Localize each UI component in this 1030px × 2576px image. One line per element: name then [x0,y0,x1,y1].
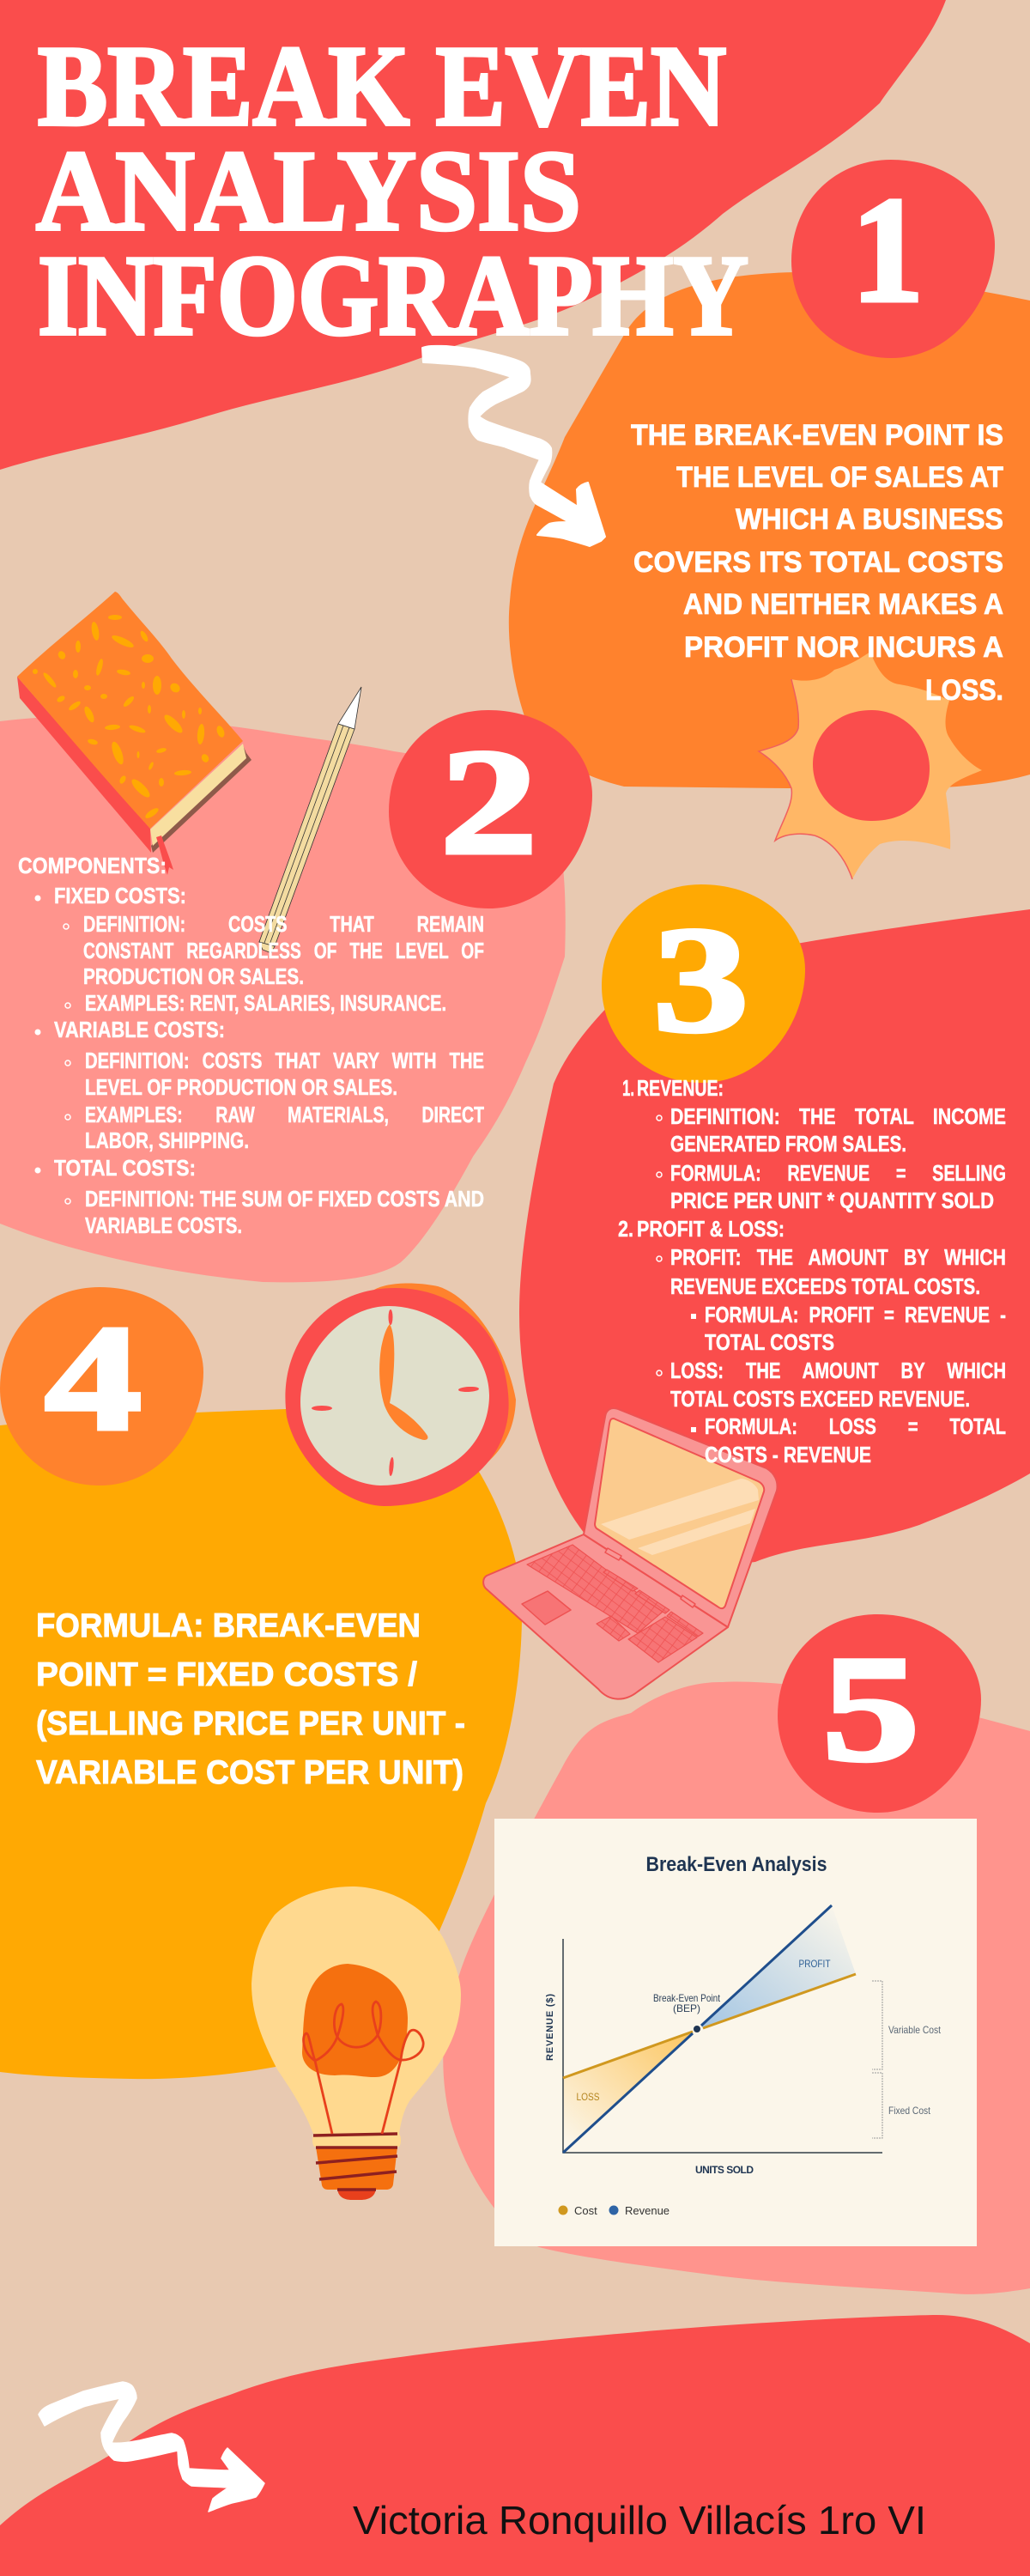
text block: revenue, profit and loss: GENERATED FROM SALES. [670,1131,906,1157]
text block: components: LEVEL OF PRODUCTION OR SALES. [85,1074,397,1100]
number badge 3 [602,884,805,1083]
number badge 2 [389,710,592,908]
text block: break-even formula: VARIABLE COST PER UNIT) [36,1754,464,1791]
text block: components: PRODUCTION OR SALES. [83,963,304,989]
panel: orange blob 1 [509,272,1030,789]
chart: break-even analysis: LOSS [577,2091,599,2103]
text block: components: DEFINITION: COSTS THAT REMAIN [83,911,484,937]
text block: revenue, profit and loss: 1. [622,1075,634,1101]
chart: break-even analysis: Fixed Cost [888,2105,931,2117]
text block: components: COMPONENTS: [18,853,167,878]
panel: amber blob 4 [0,1409,522,2079]
number badge 1 [791,160,995,358]
panel: red blob 3 [519,909,1030,1564]
text block: revenue, profit and loss: 2. [618,1216,633,1242]
number badge 4: 4 [45,1295,142,1462]
number badge 5 [778,1614,981,1813]
text block: components: FIXED COSTS: [54,883,186,908]
panel: pink blob 2 [0,716,566,1282]
text block: break-even formula: FORMULA: BREAK-EVEN [36,1607,421,1644]
paragraph end: break-even definition: PROFIT NOR INCURS A [684,631,1003,664]
text block: revenue, profit and loss: PROFIT & LOSS: [637,1216,785,1242]
chart: break-even analysis [494,1819,977,2246]
chart: break-even analysis: Variable Cost [888,2024,942,2036]
number badge 3: 3 [653,896,748,1064]
text block: components: EXAMPLES: RENT, SALARIES, INSURANCE. [85,990,446,1016]
number badge 1: 1 [851,167,924,334]
chart: break-even analysis: PROFIT [798,1958,831,1970]
text block: components: EXAMPLES: RAW MATERIALS, DIRECT [85,1102,484,1127]
text block: break-even formula [36,1607,465,1791]
chart: break-even analysis: Break-Even Analysis [645,1853,827,1876]
paragraph: break-even definition: THE BREAK-EVEN POINT IS [631,419,1003,452]
panel: pink blob 5 [443,1681,1030,2294]
text block: break-even formula: POINT = FIXED COSTS / [36,1656,417,1693]
text block: revenue, profit and loss: COSTS - REVENUE [705,1442,871,1467]
panel: bottom red blob [0,2315,1030,2576]
number badge 5: 5 [822,1625,919,1793]
number badge 4 [0,1287,203,1485]
text block: components: CONSTANT REGARDLESS OF THE LEVEL OF [83,938,484,963]
icon: pencil [259,687,361,953]
paragraph: break-even definition: THE LEVEL OF SALES AT [676,461,1003,494]
arrow: bottom squiggle [39,2382,264,2512]
paragraph: break-even definition: COVERS ITS TOTAL COSTS [633,546,1003,579]
chart: break-even analysis: Revenue [625,2204,670,2217]
text block: components: DEFINITION: COSTS THAT VARY WITH THE [85,1048,484,1073]
chart: break-even analysis: UNITS SOLD [695,2164,754,2176]
text block: components: LABOR, SHIPPING. [85,1127,249,1153]
icon: sun [759,652,982,879]
text block: components: VARIABLE COSTS. [85,1212,242,1238]
paragraph end: break-even definition [684,631,1003,707]
text block: components: DEFINITION: THE SUM OF FIXED COSTS AND [85,1186,484,1212]
chart: break-even analysis: Cost [574,2204,597,2217]
text block: components [18,853,484,1238]
number badge 2: 2 [440,719,537,886]
icon: clock [285,1284,516,1506]
paragraph: break-even definition: AND NEITHER MAKES A [683,588,1003,621]
chart: break-even analysis: Break-Even Point [653,1992,721,2004]
icon: book [17,592,251,875]
arrow: title to step 1 [422,346,605,546]
text block: revenue, profit and loss: REVENUE: [637,1075,724,1101]
title [36,22,748,359]
text block: components: TOTAL COSTS: [54,1155,196,1181]
title: INFOGRAPHY [38,232,748,359]
paragraph end: break-even definition: LOSS. [925,674,1003,707]
panel: top red background blob [0,0,946,470]
text block: revenue, profit and loss [618,1075,1006,1467]
chart: break-even analysis: REVENUE ($) [545,1994,555,2061]
paragraph: break-even definition: WHICH A BUSINESS [736,503,1003,536]
paragraph: break-even definition [631,419,1003,621]
footer: author: Victoria Ronquillo Villacís 1ro VI [353,2498,926,2543]
text block: revenue, profit and loss: TOTAL COSTS [705,1329,834,1355]
text block: break-even formula: (SELLING PRICE PER UNIT - [36,1705,465,1742]
icon: laptop [483,1408,778,1699]
chart: break-even analysis: (BEP) [673,2002,700,2014]
icon: light bulb [251,1886,461,2200]
text block: components: VARIABLE COSTS: [54,1017,225,1042]
title: BREAK EVEN [38,22,726,149]
title: ANALYSIS [36,127,581,254]
